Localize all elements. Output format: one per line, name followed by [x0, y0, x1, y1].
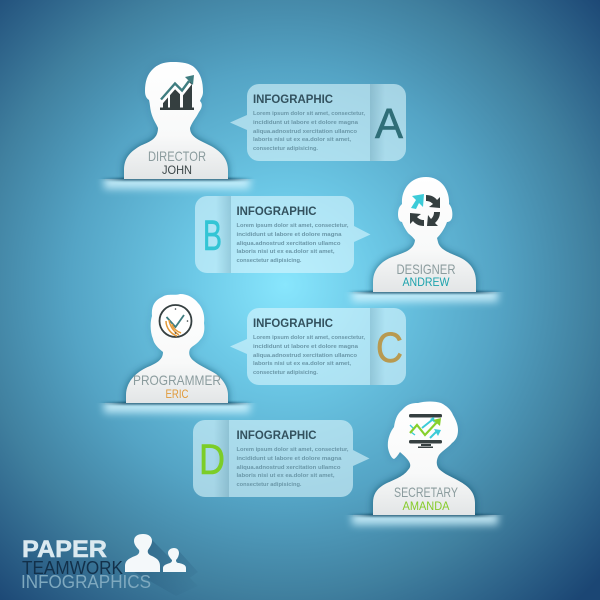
icon: large person [125, 534, 160, 572]
person: designer Andrew [348, 177, 501, 302]
title: teamwork: TEAMWORK [22, 558, 123, 578]
body text: aliqua.adnostrud xercitation ullamco [253, 129, 357, 135]
title: paper: PAPER [22, 536, 107, 563]
role: secretary: SECRETARY [394, 484, 459, 500]
body text [253, 111, 365, 152]
body text: consectetur adipisicing. [236, 482, 302, 488]
body text: consectetur adipisicing. [253, 146, 318, 152]
body text [236, 447, 349, 488]
icon: monitor with arrows [409, 414, 442, 448]
callout: D [193, 420, 370, 497]
body text: aliqua.adnostrud xercitation ullamco [236, 465, 341, 471]
heading: INFOGRAPHIC [236, 204, 317, 218]
body text: laboris nisi ut ex ea.dolor sit amet, [253, 137, 351, 143]
body text: consectetur adipisicing. [236, 258, 302, 264]
body text: Lorem ipsum dolor sit amet, consectetur, [253, 335, 365, 341]
icon: rising chart [160, 75, 194, 110]
letter D: D [199, 436, 225, 484]
body text: incididunt ut labore et dolore magna [253, 344, 359, 350]
callout: C [230, 308, 406, 385]
person: secretary Amanda [348, 402, 501, 525]
body text: aliqua.adnostrud xercitation ullamco [253, 353, 357, 359]
body text: aliqua.adnostrud xercitation ullamco [236, 241, 341, 247]
body text: Lorem ipsum dolor sit amet, consectetur, [236, 447, 349, 453]
role: director: DIRECTOR [148, 148, 206, 164]
title: infographics: INFOGRAPHICS [21, 572, 151, 592]
callout: A [230, 84, 406, 161]
name: Andrew: ANDREW [402, 275, 450, 289]
body text: laboris nisi ut ex ea.dolor sit amet, [253, 361, 351, 367]
body text: incididunt ut labore et dolore magna [253, 120, 359, 126]
letter C: C [376, 324, 403, 372]
body text: laboris nisi ut ex ea.dolor sit amet, [236, 473, 335, 479]
icon: long shadow of people [134, 538, 198, 596]
logo: paper teamwork infographics [21, 534, 198, 596]
letter A: A [375, 100, 403, 148]
name: John: JOHN [162, 163, 192, 177]
letter B: B [203, 212, 222, 260]
heading: INFOGRAPHIC [253, 316, 333, 330]
name: Eric: ERIC [166, 387, 189, 401]
person: programmer Eric [100, 294, 253, 413]
callout: B [195, 196, 370, 273]
role: designer: DESIGNER [396, 261, 456, 277]
body text: Lorem ipsum dolor sit amet, consectetur, [236, 223, 349, 229]
heading: INFOGRAPHIC [253, 92, 333, 106]
body text [253, 335, 365, 376]
icon: clock [160, 305, 192, 337]
body text: Lorem ipsum dolor sit amet, consectetur, [253, 111, 365, 117]
icon: small person [163, 548, 186, 572]
body text: laboris nisi ut ex ea.dolor sit amet, [236, 249, 335, 255]
role: programmer: PROGRAMMER [133, 372, 221, 388]
name: Amanda: AMANDA [402, 499, 450, 513]
body text: incididunt ut labore et dolore magna [236, 456, 342, 462]
heading: INFOGRAPHIC [236, 428, 317, 442]
body text: incididunt ut labore et dolore magna [236, 232, 342, 238]
body text: consectetur adipisicing. [253, 370, 318, 376]
body text [236, 223, 349, 264]
icon: cycle arrows [410, 194, 440, 226]
person: director John [100, 62, 253, 189]
